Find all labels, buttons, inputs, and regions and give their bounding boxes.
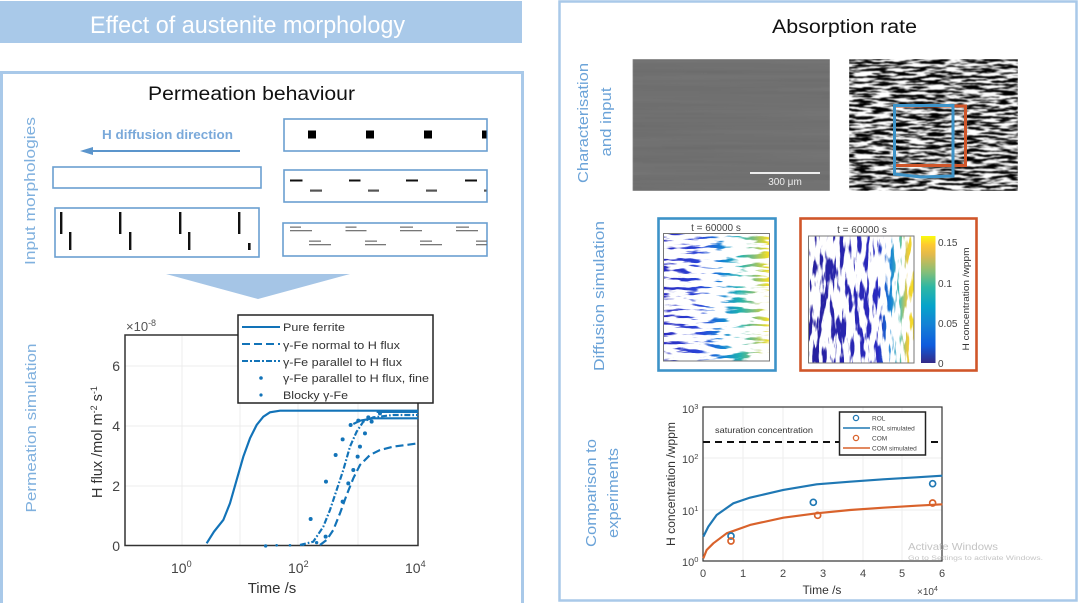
legend: COM bbox=[872, 436, 887, 442]
y axis label: s bbox=[90, 394, 106, 405]
y tick labels: 0 bbox=[112, 538, 120, 554]
curves bbox=[207, 411, 418, 548]
x tick labels: 0 bbox=[700, 568, 706, 580]
x tick labels: 4 bbox=[421, 559, 426, 569]
axes bbox=[125, 335, 418, 546]
colour bar label: H concentration /wppm bbox=[961, 247, 972, 351]
arrow: H diffusion direction bbox=[80, 147, 240, 155]
label: Input morphologies: Input morphologies bbox=[22, 117, 39, 265]
ROL simulated bbox=[703, 476, 942, 537]
y tick labels: 0 bbox=[694, 555, 698, 564]
saturation label: saturation concentration bbox=[715, 425, 813, 435]
label: Characterisation and input: and input bbox=[598, 87, 615, 156]
label: Permeation simulation: Permeation simulation bbox=[23, 344, 40, 512]
heading: Permeation behaviour: Permeation behaviour bbox=[148, 84, 356, 105]
image: micrograph with scale bar: 300 μm bbox=[768, 177, 802, 188]
y tick labels bbox=[112, 358, 120, 554]
banner: Effect of austenite morphology: Effect of austenite morphology bbox=[90, 12, 405, 39]
COM markers bbox=[728, 500, 936, 544]
ROL markers bbox=[728, 481, 936, 539]
panel: permeation behaviour bbox=[2, 72, 522, 603]
y tick labels bbox=[682, 402, 698, 569]
legend: Pure ferrite bbox=[283, 322, 345, 334]
legend: γ-Fe parallel to H flux, fine bbox=[283, 373, 429, 385]
morphology box: parallel gamma-Fe bbox=[284, 170, 487, 202]
y axis label: -1 bbox=[89, 386, 99, 394]
y axis label: -2 bbox=[89, 405, 99, 413]
x tick labels: 2 bbox=[780, 568, 786, 580]
image: micrograph with scale bar bbox=[632, 59, 830, 191]
diffusion map: orange frame with colour bar: 0.15 bbox=[938, 238, 958, 249]
exponent: 4 bbox=[934, 586, 938, 593]
x tick labels bbox=[171, 559, 426, 576]
saturation line bbox=[703, 441, 942, 443]
legend bbox=[840, 412, 926, 455]
y axis label: H flux /mol m bbox=[90, 413, 106, 498]
panel: absorption rate bbox=[560, 2, 1076, 600]
x tick labels: 10 bbox=[288, 560, 304, 576]
watermark: Activate Windows: Go to Settings to activate Windows. bbox=[908, 555, 1043, 562]
watermark: Activate Windows: Activate Windows bbox=[908, 541, 998, 553]
legend: ROL simulated bbox=[872, 426, 915, 432]
image: segmented microstructure with selection boxes bbox=[849, 59, 1018, 191]
watermark: Activate Windows bbox=[908, 541, 1043, 562]
diffusion map: blue frame bbox=[658, 218, 776, 370]
exponent: ×10 bbox=[917, 587, 934, 598]
banner: Effect of austenite morphology bbox=[0, 1, 522, 43]
morphology box: pure ferrite bbox=[53, 167, 261, 188]
grid bbox=[125, 336, 418, 545]
x axis label: Time /s bbox=[248, 580, 296, 597]
x tick labels: 6 bbox=[939, 568, 945, 580]
exponent: -8 bbox=[148, 318, 156, 328]
chart: H flux vs time bbox=[89, 315, 433, 597]
diffusion map: orange frame with colour bar bbox=[800, 218, 976, 370]
x tick labels: 5 bbox=[899, 568, 905, 580]
y tick labels: 2 bbox=[694, 452, 698, 461]
y tick labels: 1 bbox=[694, 504, 698, 513]
diffusion map: orange frame with colour bar: 0.1 bbox=[938, 279, 952, 290]
morphology box: parallel gamma-Fe, fine bbox=[283, 223, 487, 256]
label: Comparison to experiments: experiments bbox=[605, 448, 622, 538]
y axis label: H concentration /wppm bbox=[666, 422, 678, 546]
legend: ROL bbox=[872, 416, 886, 422]
x tick labels: 3 bbox=[820, 568, 826, 580]
x tick labels: 4 bbox=[860, 568, 866, 580]
diffusion map: orange frame with colour bar: 0 bbox=[938, 359, 944, 370]
heading: Absorption rate: Absorption rate bbox=[772, 17, 917, 38]
x axis label: Time /s bbox=[803, 583, 841, 597]
y tick labels: 10 bbox=[682, 557, 694, 569]
arrow: input to simulation bbox=[166, 274, 350, 299]
label: Comparison to experiments: Comparison to bbox=[583, 439, 600, 547]
y tick labels: 6 bbox=[112, 358, 120, 374]
label: H diffusion direction: H diffusion direction bbox=[102, 127, 233, 142]
label: Characterisation and input bbox=[575, 63, 615, 183]
x tick labels: 1 bbox=[740, 568, 746, 580]
legend: γ-Fe parallel to H flux bbox=[283, 357, 403, 369]
y tick labels: 4 bbox=[112, 418, 120, 434]
legend bbox=[238, 315, 433, 403]
label: Diffusion simulation: Diffusion simulation bbox=[591, 221, 608, 371]
label: Characterisation and input: Characterisation bbox=[575, 63, 592, 183]
colour bar bbox=[921, 236, 936, 363]
x tick labels: 0 bbox=[187, 559, 192, 569]
exponent: ×10 bbox=[126, 319, 148, 334]
diffusion map: blue frame: t = 60000 s bbox=[691, 223, 741, 234]
diffusion map: orange frame with colour bar: t = 60000 s bbox=[837, 225, 887, 236]
y tick labels: 10 bbox=[682, 454, 694, 466]
grid bbox=[703, 407, 942, 561]
y tick labels: 10 bbox=[682, 506, 694, 518]
chart: H concentration vs time bbox=[666, 402, 945, 598]
morphology box: blocky gamma-Fe bbox=[284, 119, 487, 151]
x tick labels: 10 bbox=[405, 560, 421, 576]
diffusion map: orange frame with colour bar: 0.05 bbox=[938, 319, 958, 330]
x tick labels: 10 bbox=[171, 560, 187, 576]
axes bbox=[703, 407, 942, 561]
legend: Blocky γ-Fe bbox=[283, 390, 348, 402]
label: Comparison to experiments bbox=[583, 439, 622, 547]
legend: γ-Fe normal to H flux bbox=[283, 340, 401, 352]
y tick labels: 2 bbox=[112, 478, 120, 494]
x tick labels bbox=[700, 568, 945, 580]
COM simulated bbox=[703, 504, 942, 558]
x tick labels: 2 bbox=[304, 559, 309, 569]
y tick labels: 3 bbox=[694, 402, 698, 411]
morphology box: vertical gamma-Fe bbox=[55, 208, 259, 257]
y tick labels: 10 bbox=[682, 404, 694, 416]
legend: COM simulated bbox=[872, 446, 917, 452]
